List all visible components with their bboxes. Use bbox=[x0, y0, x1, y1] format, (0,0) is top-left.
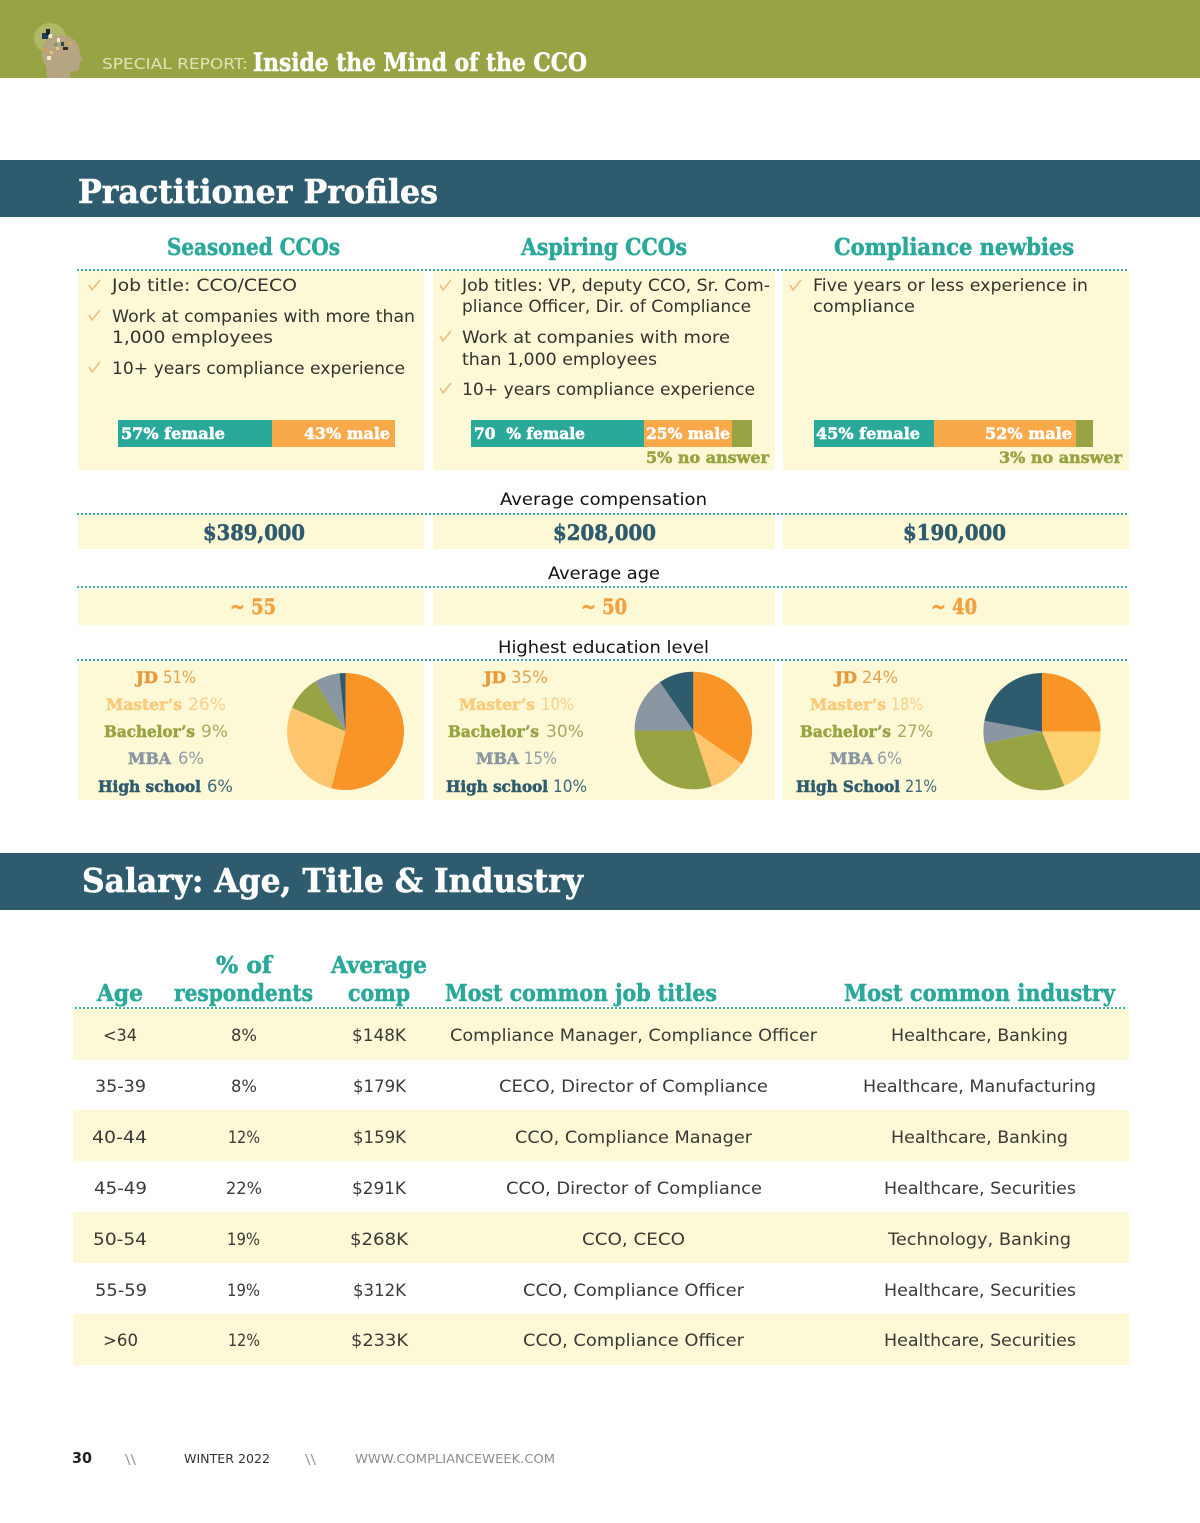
row: under 34: <34 bbox=[103, 1026, 137, 1046]
section banner: Practitioner Profiles: Practitioner Profiles bbox=[78, 172, 438, 211]
row: 55-59: $312K bbox=[353, 1281, 407, 1301]
education legend: 15% bbox=[524, 749, 557, 769]
gender bar: Aspiring: 25% male bbox=[646, 424, 730, 443]
footer bbox=[72, 1449, 555, 1468]
row: 50-54: 19% bbox=[227, 1230, 260, 1250]
row: 45-49: CCO, Director of Compliance bbox=[506, 1179, 762, 1199]
footer: 30 bbox=[72, 1449, 92, 1467]
row: over 60: Healthcare, Securities bbox=[884, 1331, 1076, 1351]
row: average compensation: $208,000 bbox=[553, 520, 656, 545]
salary table bbox=[73, 1009, 1129, 1365]
education legend bbox=[98, 668, 233, 797]
row: 50-54: $268K bbox=[350, 1230, 409, 1250]
section banner: Practitioner Profiles bbox=[0, 160, 1200, 217]
row: over 60 bbox=[103, 1331, 1076, 1351]
row: 35-39: $179K bbox=[353, 1077, 407, 1097]
panel: education, Aspiring bbox=[433, 662, 775, 800]
row: under 34: Compliance Manager, Compliance Officer bbox=[450, 1026, 817, 1046]
education legend: 6% bbox=[877, 749, 902, 769]
row: average age: ~ 40 bbox=[931, 594, 977, 619]
row: 50-54: 50-54 bbox=[93, 1230, 147, 1250]
row: over 60: 12% bbox=[228, 1331, 260, 1351]
education legend: Master’s bbox=[810, 695, 886, 714]
gender bar: Aspiring: 5% no answer bbox=[646, 448, 770, 467]
table header: Average bbox=[330, 952, 427, 979]
row: under 34: Healthcare, Banking bbox=[891, 1026, 1068, 1046]
panel: Seasoned CCOs: 1,000 employees bbox=[112, 328, 273, 348]
panel: Aspiring CCOs: Work at companies with more bbox=[462, 328, 730, 348]
education legend: 6% bbox=[178, 749, 204, 769]
panel: Aspiring CCOs bbox=[433, 271, 775, 470]
column headings bbox=[167, 234, 1074, 261]
row: 35-39: CECO, Director of Compliance bbox=[499, 1077, 768, 1097]
panel: Compliance newbies bbox=[783, 271, 1129, 470]
education legend: 35% bbox=[511, 668, 548, 688]
table header: respondents bbox=[174, 980, 313, 1007]
row: average age: ~ 55 bbox=[230, 594, 276, 619]
row: 55-59 bbox=[95, 1281, 1076, 1301]
column headings: Aspiring CCOs bbox=[520, 234, 687, 261]
education legend: Master’s bbox=[459, 695, 535, 714]
row: average compensation: $389,000 bbox=[203, 520, 305, 545]
education legend: 26% bbox=[188, 695, 226, 715]
row: 35-39: 8% bbox=[231, 1077, 257, 1097]
education legend: 18% bbox=[891, 695, 923, 715]
panel: Aspiring CCOs: 10+ years compliance experience bbox=[462, 380, 755, 400]
gender bar: Newbies: 52% male bbox=[985, 424, 1072, 443]
row: 55-59: 19% bbox=[227, 1281, 260, 1301]
panel: Aspiring CCOs: pliance Officer, Dir. of Compliance bbox=[462, 297, 751, 317]
row: 55-59: 55-59 bbox=[95, 1281, 147, 1301]
footer: \\ bbox=[305, 1453, 317, 1468]
gender bar: Newbies bbox=[814, 420, 1123, 467]
panel: education, Seasoned bbox=[78, 662, 424, 800]
panel: Seasoned CCOs bbox=[78, 271, 424, 470]
education legend: JD bbox=[482, 668, 506, 687]
row: 40-44: 40-44 bbox=[92, 1128, 147, 1148]
table header: Most common job titles bbox=[445, 980, 717, 1007]
row: 40-44: $159K bbox=[353, 1128, 407, 1148]
panel: education, Newbies bbox=[783, 662, 1129, 800]
education legend: High School bbox=[796, 777, 900, 796]
footer: \\ bbox=[125, 1453, 137, 1468]
row: 45-49: Healthcare, Securities bbox=[884, 1179, 1076, 1199]
education legend: High school bbox=[446, 777, 548, 796]
pie chart: Aspiring education bbox=[634, 672, 752, 789]
column headings: Seasoned CCOs bbox=[167, 234, 340, 261]
education legend: High school bbox=[98, 777, 201, 796]
row: 55-59: Healthcare, Securities bbox=[884, 1281, 1076, 1301]
row: 35-39: 35-39 bbox=[95, 1077, 146, 1097]
panel: Aspiring CCOs: Job titles: VP, deputy CCO, Sr. Com- bbox=[461, 276, 770, 296]
header title: Inside the Mind of the CCO bbox=[253, 48, 587, 77]
row: under 34: $148K bbox=[352, 1026, 407, 1046]
footer: WWW.COMPLIANCEWEEK.COM bbox=[355, 1452, 555, 1466]
education legend: MBA bbox=[128, 749, 172, 768]
education legend: JD bbox=[833, 668, 857, 687]
panel: Seasoned CCOs: Job title: CCO/CECO bbox=[111, 276, 297, 296]
row: average age: ~ 50 bbox=[581, 594, 627, 619]
gender bar: Seasoned bbox=[118, 420, 395, 447]
gender bar: Newbies: 3% no answer bbox=[999, 448, 1123, 467]
row: 40-44 bbox=[92, 1128, 1068, 1148]
row: under 34: 8% bbox=[231, 1026, 257, 1046]
panel: Aspiring CCOs: than 1,000 employees bbox=[462, 350, 657, 370]
row: average age: Average age bbox=[548, 564, 660, 584]
education legend: 24% bbox=[862, 668, 898, 688]
gender bar: Newbies: 45% female bbox=[816, 424, 920, 443]
gender bar: Aspiring: 70 % female bbox=[474, 424, 585, 443]
education legend bbox=[446, 668, 587, 797]
section banner: Salary bbox=[0, 853, 1200, 910]
row: average compensation: $190,000 bbox=[903, 520, 1006, 545]
table header bbox=[96, 952, 1116, 1007]
education legend: JD bbox=[134, 668, 158, 687]
row: average compensation bbox=[78, 490, 1129, 549]
education legend: MBA bbox=[476, 749, 520, 768]
row: 35-39: Healthcare, Manufacturing bbox=[863, 1077, 1096, 1097]
panel: Compliance newbies: compliance bbox=[813, 297, 915, 317]
education legend: 10% bbox=[541, 695, 574, 715]
footer: WINTER 2022 bbox=[184, 1452, 270, 1466]
education legend: Bachelor’s bbox=[104, 722, 195, 741]
row: average compensation: Average compensation bbox=[500, 490, 707, 510]
row: average age bbox=[78, 564, 1129, 625]
section banner: Salary: Salary: Age, Title & Industry bbox=[82, 861, 584, 900]
row: 45-49: 22% bbox=[226, 1179, 262, 1199]
pie chart: Newbies education bbox=[983, 673, 1101, 790]
row: 40-44: CCO, Compliance Manager bbox=[515, 1128, 752, 1148]
education legend: Bachelor’s bbox=[448, 722, 539, 741]
education legend: Bachelor’s bbox=[800, 722, 891, 741]
row: under 34 bbox=[103, 1026, 1068, 1046]
education legend: MBA bbox=[830, 749, 874, 768]
education legend: 10% bbox=[553, 777, 587, 797]
row: over 60: >60 bbox=[103, 1331, 138, 1351]
row: over 60: $233K bbox=[351, 1331, 409, 1351]
panel: Compliance newbies: Five years or less experience in bbox=[813, 276, 1088, 296]
gender bar: Aspiring bbox=[471, 420, 770, 467]
education legend: Master’s bbox=[106, 695, 182, 714]
row: 35-39 bbox=[95, 1077, 1096, 1097]
row: 55-59: CCO, Compliance Officer bbox=[523, 1281, 744, 1301]
heading: highest education level: Highest education level bbox=[498, 638, 709, 658]
table header: comp bbox=[348, 980, 410, 1007]
education legend: 30% bbox=[546, 722, 584, 742]
panel: Seasoned CCOs: 10+ years compliance experience bbox=[112, 359, 405, 379]
gender bar: Seasoned: 43% male bbox=[304, 424, 390, 443]
table header: Age bbox=[96, 980, 143, 1007]
panel: Seasoned CCOs: Work at companies with more than bbox=[112, 307, 415, 327]
header label: SPECIAL REPORT: bbox=[102, 55, 248, 73]
row: 50-54: CCO, CECO bbox=[582, 1230, 685, 1250]
row: 45-49: $291K bbox=[352, 1179, 407, 1199]
gender bar: Seasoned: 57% female bbox=[121, 424, 225, 443]
row: over 60: CCO, Compliance Officer bbox=[523, 1331, 744, 1351]
column headings: Compliance newbies bbox=[834, 234, 1074, 261]
education legend: 27% bbox=[897, 722, 933, 742]
row: 45-49: 45-49 bbox=[94, 1179, 147, 1199]
table header: % of bbox=[216, 952, 274, 979]
education legend: 9% bbox=[201, 722, 228, 742]
row: 50-54 bbox=[93, 1230, 1071, 1250]
row: 50-54: Technology, Banking bbox=[887, 1230, 1071, 1250]
education legend: 6% bbox=[207, 777, 233, 797]
education legend: 51% bbox=[163, 668, 196, 688]
row: 40-44: 12% bbox=[228, 1128, 260, 1148]
row: 45-49 bbox=[94, 1179, 1076, 1199]
education legend bbox=[796, 668, 937, 797]
education legend: 21% bbox=[905, 777, 937, 797]
header banner bbox=[0, 0, 1200, 78]
pie chart: Seasoned education bbox=[287, 673, 404, 790]
row: 40-44: Healthcare, Banking bbox=[891, 1128, 1068, 1148]
icon: head with ideas bbox=[34, 23, 83, 78]
table header: Most common industry bbox=[844, 980, 1116, 1007]
